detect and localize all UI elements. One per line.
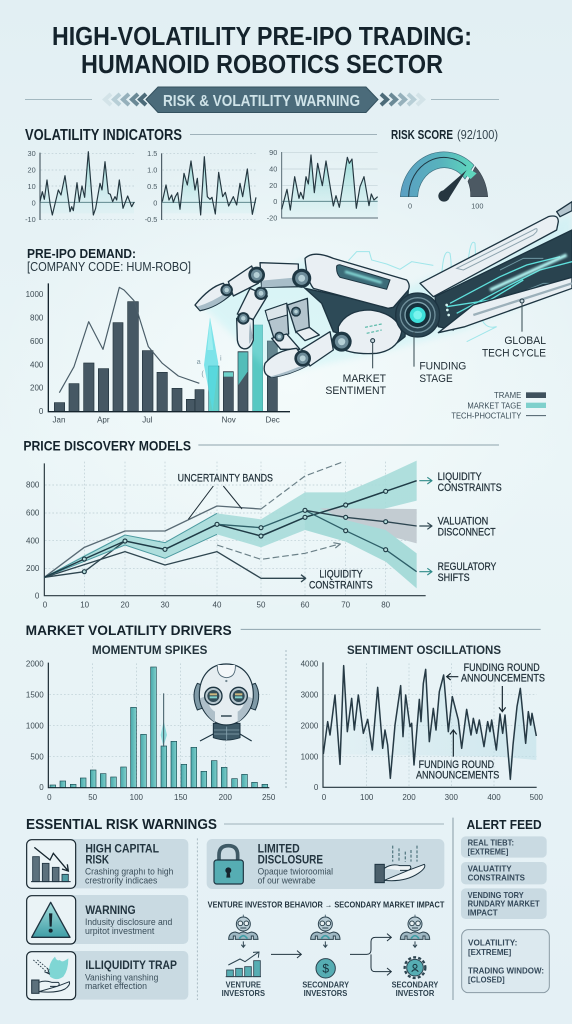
heading: pre-ipo demand (27, 246, 191, 274)
card: limited disclosure: LIMITED (258, 843, 300, 856)
gauge: risk score (400, 152, 488, 211)
line chart: price discovery models: 400 (26, 536, 40, 545)
bar chart: pre-ipo demand: Apr (97, 416, 110, 425)
label: liquidity constraints, lower (309, 569, 373, 592)
bar chart: momentum spikes: 50 (88, 793, 98, 802)
title: HIGH-VOLATILITY PRE-IPO TRADING: (52, 23, 472, 51)
chart: volatility indicator 1: 10 (28, 182, 36, 191)
card: high capital risk: crestrority indicaes (85, 876, 158, 886)
curled fingers (237, 287, 319, 349)
callout: funding round announcements, upper: FUNDING ROUND (464, 662, 540, 674)
bar chart: momentum spikes (26, 644, 276, 802)
callout: uncertainty bands (178, 472, 273, 519)
icon: hand with vanishing bars (375, 846, 425, 883)
legend: TECH-PHOCTALITY (451, 411, 522, 421)
forearm core (435, 230, 572, 330)
line chart: sentiment oscillations: 3000 (301, 690, 319, 699)
alert: valuatity constraints: VALUATITY (468, 864, 512, 874)
card: warning (27, 895, 188, 944)
card: high capital risk (27, 839, 188, 888)
heading: risk score: RISK SCORE (391, 128, 453, 142)
flow: venture investor behavior to secondary market impact: VENTURE INVESTOR BEHAVIOR → SECONDARY MARKET IMPACT (208, 900, 444, 910)
bar chart: momentum spikes: 100 (130, 793, 144, 802)
callout: funding round announcements, lower: ANNOUNCEMENTS (416, 770, 499, 782)
line chart: sentiment oscillations: 0 (322, 793, 327, 802)
bar chart: pre-ipo demand: ( (201, 369, 204, 378)
alert: vending tory (461, 888, 547, 919)
callout: global tech cycle (482, 299, 546, 359)
energy traces (348, 242, 497, 342)
line chart: sentiment oscillations: 300 (445, 793, 459, 802)
callout: market sentiment (325, 339, 386, 397)
forearm upper plate (420, 202, 572, 297)
illustration: robotic hand and forearm (195, 202, 572, 421)
chart: volatility indicator 3: 40 (269, 165, 277, 174)
bar chart: pre-ipo demand: 800 (30, 314, 44, 323)
heading: pre-ipo demand: [COMPANY CODE: HUM-ROBO] (27, 260, 191, 274)
chart: volatility indicator 1: -10 (25, 215, 36, 224)
alert: real tiebt (461, 836, 547, 858)
line chart: price discovery models: 600 (26, 509, 40, 518)
line chart: sentiment oscillations: 4000 (301, 659, 319, 668)
wrist joint (396, 293, 440, 337)
callout: funding round announcements, upper: ANNOUNCEMENTS (461, 672, 545, 684)
bar chart: pre-ipo demand: 600 (30, 337, 44, 346)
bar chart: pre-ipo demand: Dec (266, 416, 280, 425)
gauge: risk score: 100 (471, 202, 483, 211)
line chart: sentiment oscillations: 0 (314, 783, 319, 792)
line chart: price discovery models: 70 (341, 601, 351, 610)
alert: vending tory: IMPACT (468, 908, 498, 918)
line chart: price discovery models (26, 461, 502, 610)
line chart: price discovery models: 200 (26, 564, 40, 573)
bar chart: momentum spikes: 1000 (26, 721, 44, 730)
status box: volatility and trading window: TRADING WINDOW: (468, 965, 544, 975)
legend: MARKET TAGE (467, 400, 522, 410)
icon: warning triangle (32, 902, 70, 937)
chart: volatility indicator 1 (25, 149, 135, 224)
label: liquidity constraints, right: CONSTRAINTS (438, 482, 502, 494)
callout: funding stage: FUNDING (419, 361, 466, 373)
callout: market sentiment: SENTIMENT (325, 385, 386, 397)
bar chart: momentum spikes: 250 (262, 793, 276, 802)
card: high capital risk: RISK (85, 854, 109, 867)
line chart: price discovery models: 80 (381, 601, 391, 610)
line chart: price discovery models: 0 (35, 592, 40, 601)
label: regulatory shifts: SHIFTS (438, 572, 470, 584)
index finger (195, 263, 298, 311)
heading: risk score: (92/100) (457, 128, 498, 142)
card: limited disclosure: Opaque twioroomial (258, 866, 333, 876)
card: limited disclosure: of our wewrabe (258, 876, 316, 886)
status box: volatility and trading window: [CLOSED] (468, 975, 505, 985)
line chart: sentiment oscillations: SENTIMENT OSCILLATIONS (347, 644, 501, 657)
alert: real tiebt: [EXTREME] (468, 846, 509, 856)
chart: volatility indicator 1: 0 (32, 198, 36, 207)
label: regulatory shifts: REGULATORY (438, 561, 496, 573)
legend (451, 390, 546, 421)
label: liquidity constraints, lower: LIQUIDITY (319, 569, 363, 581)
icon: falling bar chart (31, 847, 71, 882)
chart: volatility indicator 2: 0.5 (147, 182, 157, 191)
line chart: price discovery models: 60 (301, 601, 310, 610)
bar chart: momentum spikes: MOMENTUM SPIKES (92, 644, 208, 657)
bar chart: momentum spikes: 1500 (26, 690, 44, 699)
card: illiquidity trap (27, 951, 188, 1000)
label: valuation disconnect: VALUATION (438, 515, 488, 527)
bar chart: momentum spikes: 200 (219, 793, 233, 802)
node: venture investors (222, 915, 266, 998)
legend: TRAME (494, 390, 522, 400)
line chart: sentiment oscillations: 200 (402, 793, 416, 802)
title: HUMANOID ROBOTICS SECTOR (81, 51, 443, 79)
node: secondary investor (392, 915, 439, 998)
label: liquidity constraints, right: LIQUIDITY (438, 471, 482, 483)
callout: funding stage: STAGE (419, 373, 453, 385)
bar chart: momentum spikes: 0 (39, 783, 44, 792)
line chart: price discovery models: 20 (121, 601, 130, 610)
card: warning: WARNING (85, 904, 136, 917)
bar chart: pre-ipo demand: 0 (39, 407, 44, 416)
panel: alert feed (453, 817, 549, 1000)
line chart: sentiment oscillations: 100 (360, 793, 374, 802)
chart: volatility indicator 3: 20 (269, 181, 277, 190)
alert: vending tory: VENDING TORY (468, 890, 524, 900)
card: high capital risk: Crashing graphı to high (85, 867, 173, 877)
node: secondary investors: INVESTORS (304, 989, 348, 998)
bar chart: pre-ipo demand: 400 (30, 360, 44, 369)
callout: uncertainty bands: UNCERTAINTY BANDS (178, 472, 273, 484)
palm underside (305, 288, 408, 348)
node: secondary investor: SECONDARY (392, 981, 439, 990)
callout: global tech cycle: TECH CYCLE (482, 347, 546, 359)
forearm lower plate (438, 277, 572, 333)
banner: risk and volatility warning (25, 87, 499, 112)
node: venture investors: INVESTORS (222, 989, 266, 998)
gauge: risk score: 0 (408, 202, 412, 211)
title (52, 23, 472, 79)
chart: volatility indicator 2: 1.5 (147, 149, 157, 158)
card: high capital risk: HIGH CAPITAL (85, 843, 159, 856)
uncertainty bands (44, 461, 417, 588)
card: illiquidity trap: Vanishing vanshing (85, 972, 158, 982)
line chart: price discovery models: 800 (26, 481, 40, 490)
flow: venture investor behavior to secondary market impact (208, 900, 444, 998)
label: valuation disconnect (438, 515, 496, 538)
line chart: price discovery models: 40 (213, 601, 222, 610)
node: secondary investors: $ (322, 962, 329, 976)
chart: volatility indicator 2 (145, 149, 256, 224)
chart: volatility indicator 2: -0.5 (145, 215, 157, 224)
card: illiquidity trap: ILLIQUIDITY TRAP (85, 959, 177, 972)
alert: valuatity constraints (461, 862, 547, 884)
label: regulatory shifts (438, 561, 496, 584)
chart: volatility indicator 3: -20 (267, 214, 277, 223)
panel: alert feed: ALERT FEED (467, 817, 542, 832)
banner: risk and volatility warning: RISK & VOLATILITY WARNING (163, 93, 360, 110)
line chart: price discovery models: 50 (257, 601, 266, 610)
callout: funding round announcements, upper (447, 662, 545, 712)
callout: market sentiment: MARKET (343, 373, 386, 385)
heading: pre-ipo demand: PRE-IPO DEMAND: (27, 246, 136, 261)
bar chart: pre-ipo demand: Nov (222, 416, 236, 425)
heading: price discovery models: PRICE DISCOVERY MODELS (23, 439, 191, 454)
thumb (264, 310, 402, 377)
chart: volatility indicator 2: 1.0 (147, 166, 157, 175)
line chart: sentiment oscillations: 1000 (301, 752, 319, 761)
alert: vending tory: RUNDARY MARKET (468, 899, 540, 909)
bar chart: pre-ipo demand (26, 283, 290, 425)
bar chart: pre-ipo demand: 1000 (26, 290, 44, 299)
line chart: price discovery models: 0 (43, 601, 48, 610)
card: limited disclosure (197, 838, 444, 1000)
chart: volatility indicator 1: 30 (28, 149, 36, 158)
chart: volatility indicator 3: 90 (269, 148, 277, 157)
icon: hand with vanishing liquidity (32, 957, 70, 993)
heading: volatility indicators: VOLATILITY INDICATORS (25, 127, 182, 144)
node: secondary investors: SECONDARY (302, 981, 350, 990)
chart: volatility indicator 1: 20 (28, 166, 36, 175)
alert: real tiebt: REAL TIEBT: (468, 838, 514, 848)
alert: valuatity constraints: CONSTRAINTS (468, 872, 525, 882)
heading: essential risk warnings: ESSENTIAL RISK WARNINGS (26, 817, 217, 833)
line chart: sentiment oscillations: 400 (487, 793, 501, 802)
heading: market volatility drivers: MARKET VOLATILITY DRIVERS (26, 623, 232, 638)
card: limited disclosure: DISCLOSURE (258, 854, 323, 867)
line chart: price discovery models: 10 (80, 601, 90, 610)
bar chart: pre-ipo demand: i (220, 354, 222, 363)
bar chart: momentum spikes: 500 (30, 752, 44, 761)
icon: robot head (194, 664, 259, 741)
back of hand (292, 254, 409, 308)
icon: padlock (214, 846, 243, 884)
bar chart: pre-ipo demand: 200 (30, 384, 44, 393)
node: venture investors: VENTURE (226, 981, 262, 990)
label: liquidity constraints, lower: CONSTRAINTS (309, 580, 373, 592)
status box: volatility and trading window: VOLATILITY: (468, 938, 517, 948)
card: warning: urpitot investment (85, 926, 155, 936)
arrow: split to secondary investor (350, 934, 391, 975)
callout: funding stage (414, 332, 466, 385)
line chart: price discovery models: 30 (161, 601, 170, 610)
node: secondary investors (302, 915, 350, 998)
status box: volatility and trading window: [EXTREME] (468, 947, 512, 957)
bar chart: pre-ipo demand: Jul (142, 416, 153, 425)
card: warning: Indusity disclosure and (85, 917, 172, 927)
node: secondary investor: INVESTOR (396, 989, 435, 998)
bar chart: momentum spikes: 2000 (26, 659, 44, 668)
bar chart: momentum spikes: 0 (47, 793, 52, 802)
status box: volatility and trading window (462, 930, 549, 993)
label: liquidity constraints, right (438, 471, 502, 494)
card: illiquidity trap: market effection (85, 981, 147, 991)
line chart: sentiment oscillations: 2000 (301, 721, 319, 730)
bar chart: pre-ipo demand: Jan (53, 416, 65, 425)
chart: volatility indicator 3: 0 (273, 197, 277, 206)
bar chart: pre-ipo demand: a (197, 357, 202, 366)
callout: global tech cycle: GLOBAL (504, 335, 546, 347)
callout: funding round announcements, lower: FUNDING ROUND (419, 759, 494, 771)
label: valuation disconnect: DISCONNECT (438, 526, 496, 538)
bar chart: momentum spikes: 150 (174, 793, 188, 802)
arrow: venture to secondary (271, 951, 301, 958)
line chart: sentiment oscillations (286, 644, 545, 802)
line chart: sentiment oscillations: 500 (530, 793, 544, 802)
callout: funding round announcements, lower (416, 730, 499, 782)
chart: volatility indicator 2: 0 (153, 198, 157, 207)
chart: volatility indicator 3 (267, 148, 378, 223)
